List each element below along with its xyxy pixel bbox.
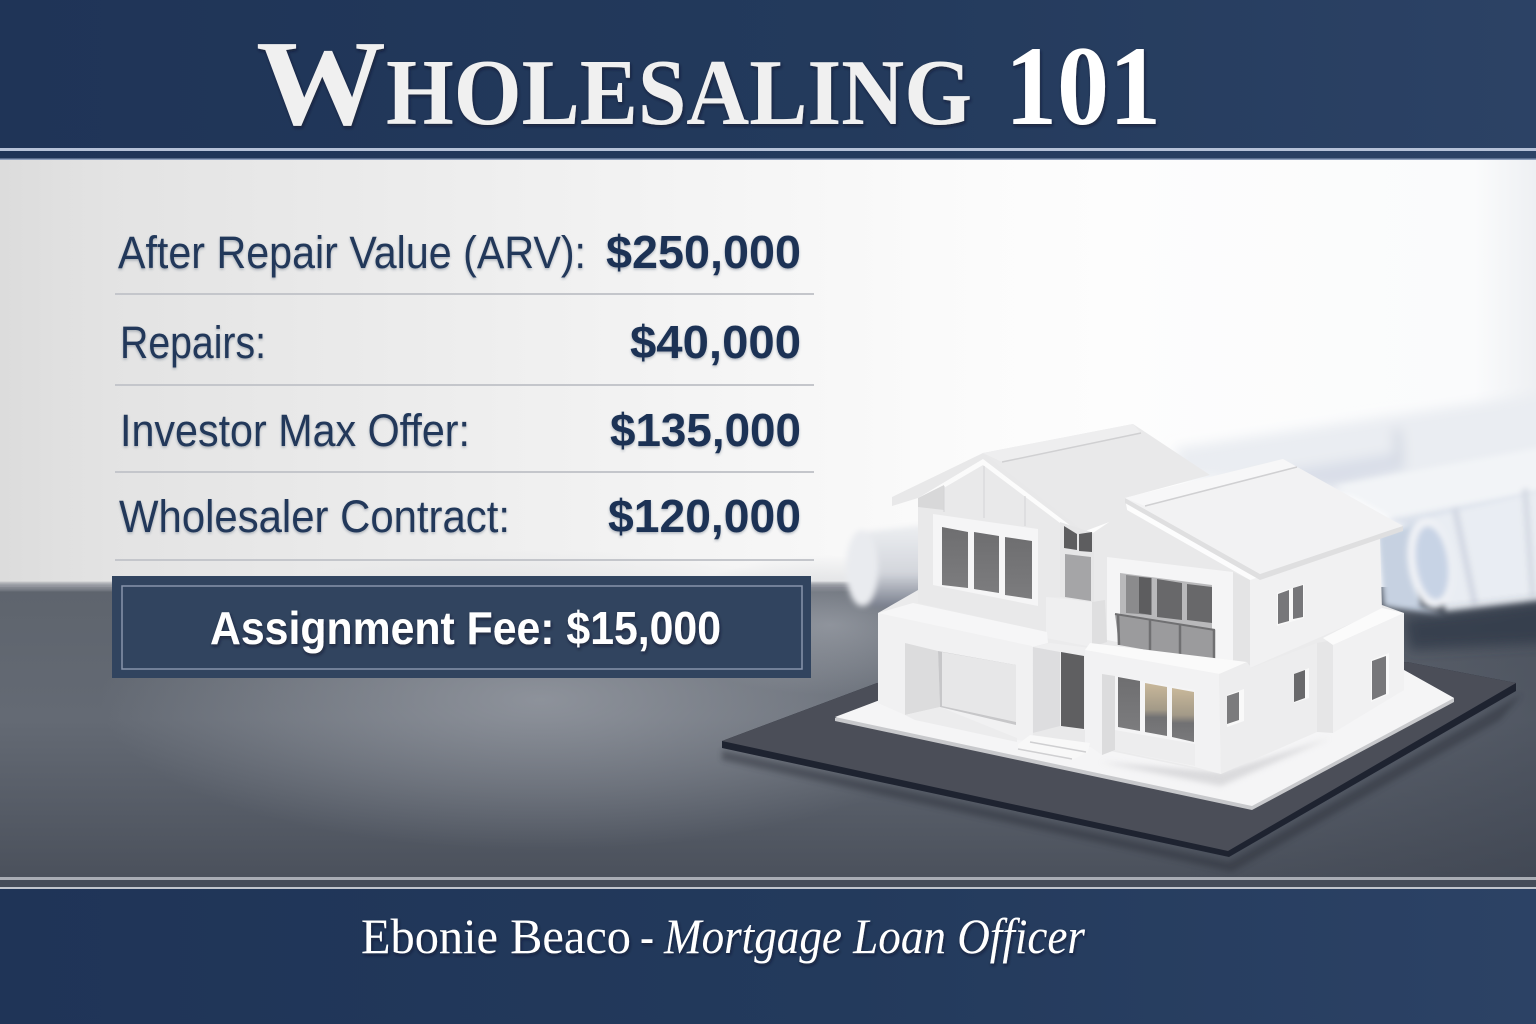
footer credit: Ebonie Beaco [361,908,631,964]
left gable fascia [892,453,1080,533]
tall narrow window [1060,522,1094,603]
rear roof [983,424,1210,533]
row: repairs: $40,000 [630,316,801,368]
row: ARV: $250,000 [606,226,801,278]
house model on base [722,424,1522,872]
left roll [846,525,925,612]
lower left block [878,603,1048,742]
balcony side block [1046,597,1107,647]
row: investor max offer [120,404,801,456]
blurred blueprint rolls [846,385,1536,650]
lower right block [1085,643,1317,774]
row: repairs [120,316,801,368]
balcony window assembly [1107,557,1250,665]
footer credit: - [640,908,654,964]
row: wholesaler contract: $120,000 [608,490,801,542]
entry door [1032,643,1090,745]
middle roll [1335,436,1536,530]
right gable roof [1125,459,1403,580]
assignment fee callout [112,576,811,678]
row: wholesaler contract [119,490,801,542]
title: HOLESALING [386,41,972,145]
center upper wall [1090,510,1250,680]
right end block [1317,608,1404,733]
white plate [835,670,1454,810]
upper left window [933,514,1038,606]
base shadow [722,694,1522,872]
row: ARV: After Repair Value (ARV): [118,227,586,278]
header band [0,0,1536,160]
right wall upper [1250,538,1382,668]
upper side window [1277,584,1304,626]
ground floor bay window [1115,676,1195,744]
dark base board [722,662,1516,857]
house body filler [878,590,1404,774]
shadow under front roll [1404,596,1536,650]
upper left wall [918,465,1060,632]
title: 101 [1005,24,1161,149]
title: W [256,16,386,151]
front roll [1402,476,1536,612]
back roll [1175,385,1536,492]
back sheet behind front roll [1378,520,1445,616]
row: investor max offer: $135,000 [610,404,801,456]
assignment fee callout: Assignment Fee: $15,000 [210,602,721,654]
row: investor max offer: Investor Max Offer: [120,405,470,456]
small lower windows [1227,653,1389,727]
footer credit: Mortgage Loan Officer [663,908,1085,964]
background: desk surface [0,550,1536,882]
financial table [115,226,814,561]
row: repairs: Repairs: [120,317,266,368]
entry steps [1018,735,1090,760]
row: wholesaler contract: Wholesaler Contract: [119,491,510,542]
footer band [0,877,1536,1024]
background: wall [0,158,1536,593]
